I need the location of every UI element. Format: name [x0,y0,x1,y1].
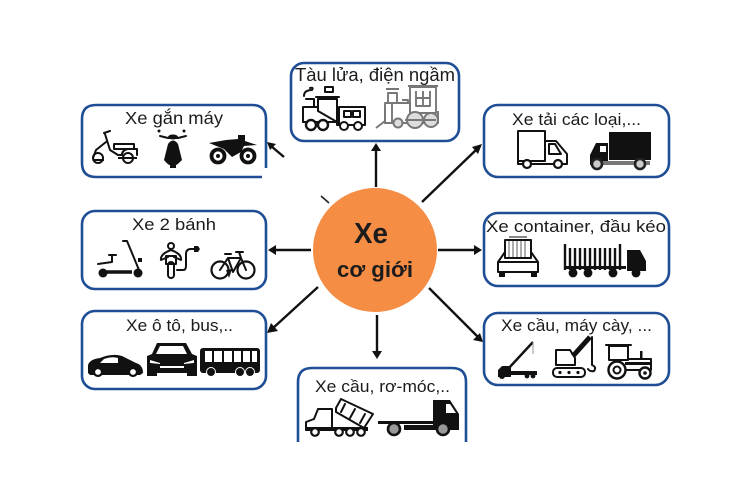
icon: electric scooter [98,241,142,278]
icon: crawler crane [553,337,595,377]
heading: Xe container, đầu kéo: Xe container, đầu kéo [486,217,666,236]
icon: flatbed truck [378,400,459,435]
icon: scooter [93,131,137,163]
icon: grey steam locomotive [376,86,438,128]
icon: hatchback car [88,355,143,376]
icon: container truck side view [564,244,646,277]
panel: Xe tải các loại [484,105,669,177]
icon: semi truck front view [498,237,538,277]
icon: dirt bike [209,135,257,162]
panel: Xe cầu, rơ-móc [298,368,466,442]
icon: outline van truck [518,131,567,168]
heading: Xe cầu, máy cày: Xe cầu, máy cày, ... [501,317,652,335]
arrow: to Xe gắn máy [267,142,284,157]
icon: bus [200,348,260,376]
arrow: to Tàu lửa [371,143,381,187]
icon: outline locomotive with carriage [303,87,365,130]
arrow: to Xe 2 bánh [268,245,311,255]
heading: Xe cầu, rơ-móc: Xe cầu, rơ-móc,.. [315,377,450,396]
icon: black box truck [590,132,651,169]
icon: crane truck [498,342,537,379]
icon: moped front view [158,130,186,168]
center subtitle: cơ giới: cơ giới [337,257,413,282]
heading: Tàu lửa, điện ngầm: Tàu lửa, điện ngầm [295,65,455,85]
arrow: to Xe ô tô [267,287,318,333]
center title: Xe: Xe [354,218,388,250]
panel: Xe 2 bánh [82,211,266,289]
icon: dump truck [306,399,373,436]
icon: electric bike rider [161,243,200,278]
icon: electric bicycle [212,252,254,278]
heading: Xe 2 bánh: Xe 2 bánh [132,215,216,234]
panel: Xe ô tô, bus [82,311,266,389]
heading: Xe gắn máy: Xe gắn máy [125,107,223,128]
arrow: to Xe container [438,245,482,255]
icon: car front view [147,343,197,376]
panel: Tàu lửa, điện ngầm [291,63,459,141]
heading: Xe tải các loại: Xe tải các loại,... [512,110,641,129]
center circle: Xe cơ giới [313,188,437,312]
panel: Xe container, đầu kéo [484,213,669,286]
arrow: to Xe cầu, rơ-móc [372,315,382,359]
panel: Xe cầu, máy cày [484,313,669,385]
arrow: to Xe cầu, máy cày [429,288,483,342]
arrow: to Xe tải [422,144,482,202]
panel: Xe gắn máy [82,105,266,177]
heading: Xe ô tô, bus: Xe ô tô, bus,.. [126,316,233,335]
icon: tractor [606,345,651,378]
